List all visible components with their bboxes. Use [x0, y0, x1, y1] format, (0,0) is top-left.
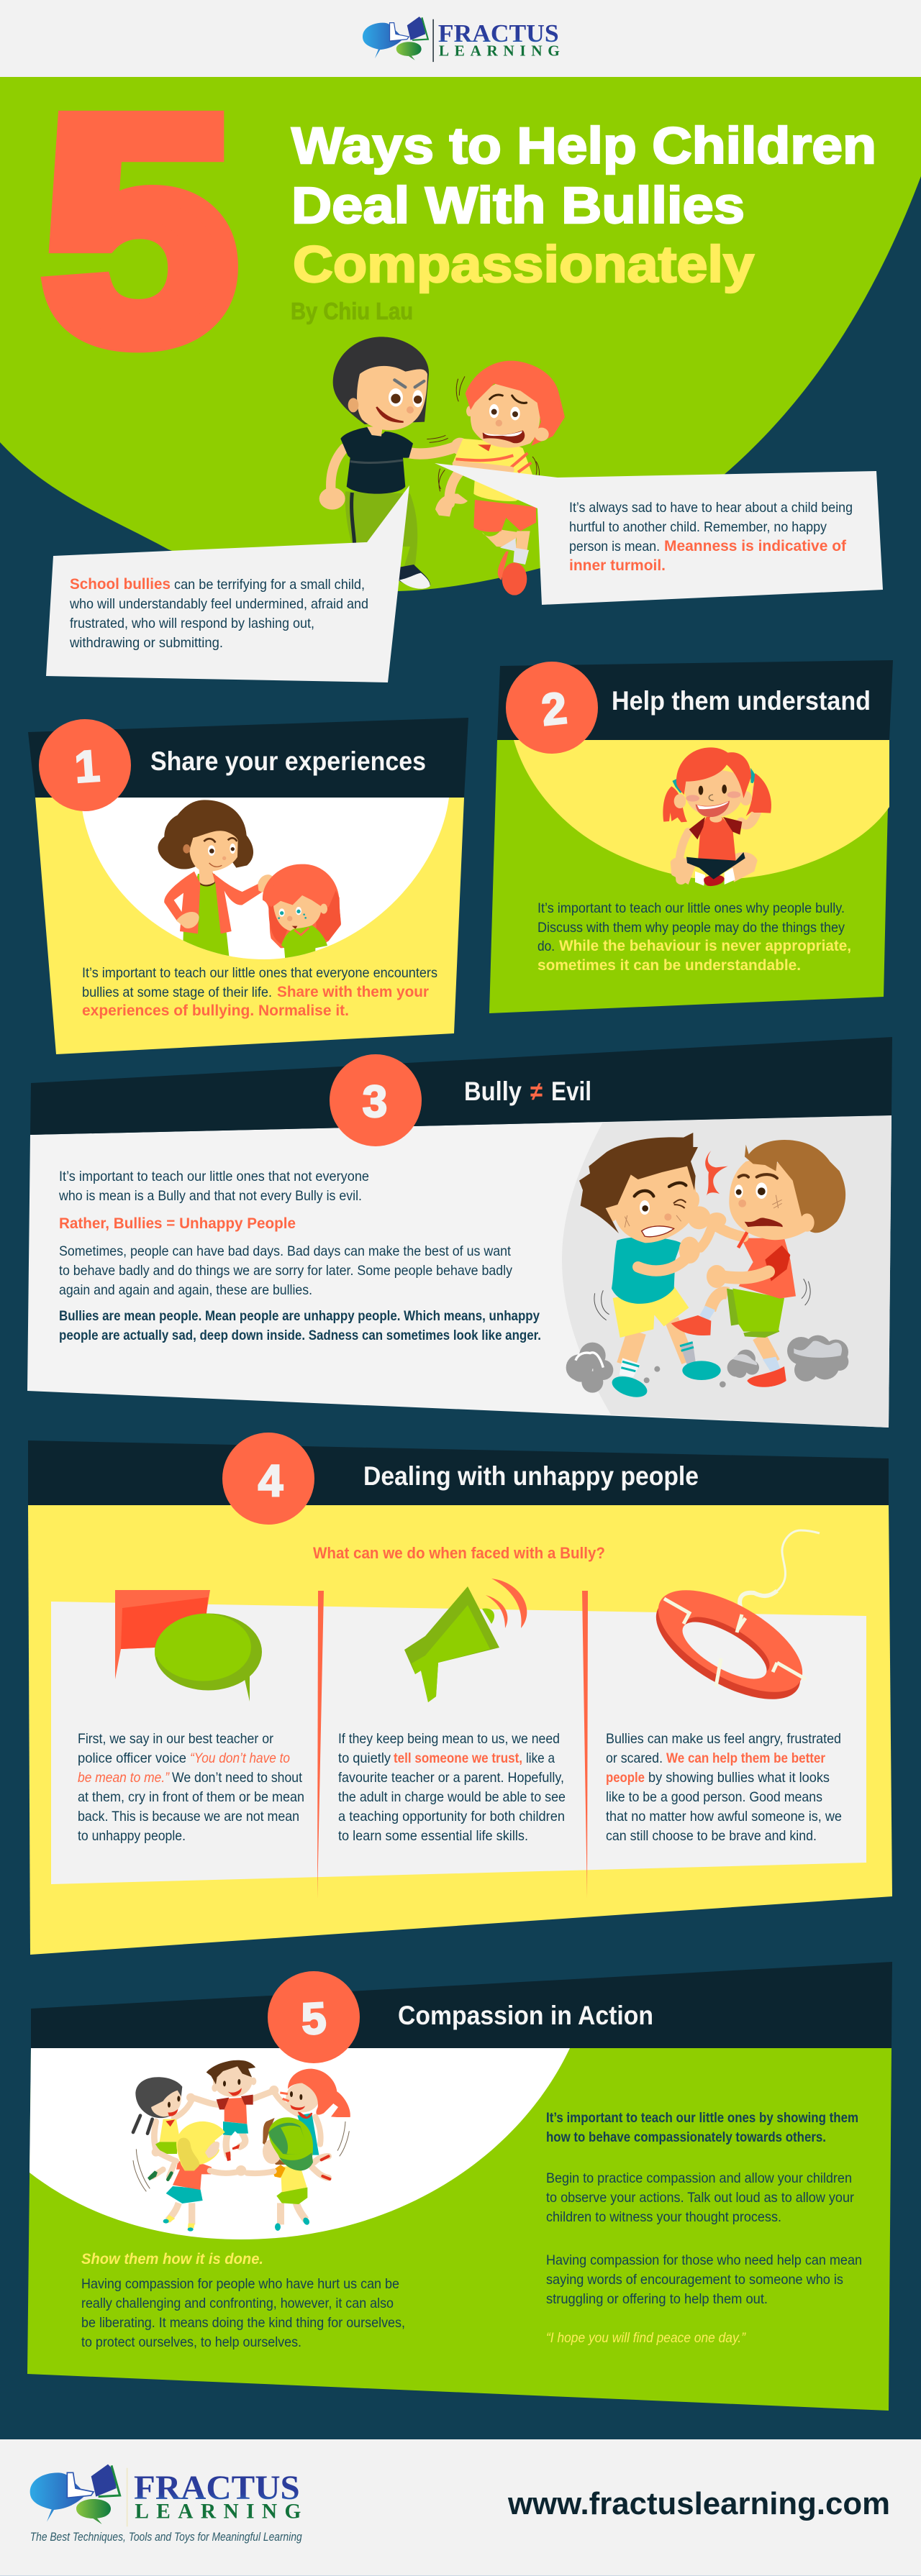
- logo: Fractus Learning top: LEARNING: [439, 42, 560, 60]
- callout: sad to hear: inner turmoil.: [569, 557, 666, 574]
- number badge 4: [222, 1433, 314, 1525]
- dividers: [317, 1591, 588, 1899]
- column 3 text: like to be a good person. Good means: [606, 1789, 822, 1805]
- logo: Fractus Learning top: FRACTUS: [438, 19, 559, 47]
- text: panel 3: who is mean is a Bully and that not every Bully is evil.: [58, 1188, 362, 1204]
- callout: school bullies: withdrawing or submitting.: [69, 635, 223, 651]
- heading 4: Dealing with unhappy people: [363, 1461, 699, 1491]
- left paragraph: really challenging and confronting, however, it can also: [81, 2296, 394, 2311]
- number badge 2: [506, 662, 598, 754]
- panel 5: compassion in action: [27, 1962, 892, 2411]
- icon: life ring: [640, 1530, 820, 1719]
- right paragraphs: Having compassion for those who need help can mean: [546, 2252, 862, 2268]
- callout: school bullies: who will understandably feel undermined, afraid and: [69, 596, 368, 612]
- number badge 3: 3: [363, 1077, 387, 1127]
- left boy: [579, 1133, 721, 1401]
- logo: Fractus Learning footer: LEARNING: [135, 2500, 301, 2524]
- text: panel 1: Share with them your: [277, 983, 430, 1000]
- callout: sad to hear: [435, 463, 883, 605]
- callout: school bullies: frustrated, who will respond by lashing out,: [70, 616, 314, 631]
- text: panel 3: Bullies are mean people. Mean people are unhappy people. Which means, unhappy: [59, 1308, 540, 1324]
- callout: school bullies: can be terrifying for a small child,: [174, 577, 365, 593]
- text: panel 2: [537, 900, 851, 974]
- panel 1: share your experiences: [28, 718, 468, 1054]
- hero green shape: [0, 77, 921, 591]
- right paragraphs: to observe your actions. Talk out loud as to allow your: [546, 2190, 854, 2206]
- panel 4: dealing with unhappy people: [28, 1433, 892, 1955]
- heading 3: Evil: [551, 1077, 591, 1106]
- column 3 text: Bullies can make us feel angry, frustrated: [606, 1731, 841, 1747]
- column 1 text: be mean to me.”: [78, 1770, 170, 1786]
- website address: www.fractuslearning.com: [507, 2486, 890, 2521]
- footer: [0, 2439, 921, 2576]
- column 1 text: back. This is because we are not mean: [78, 1809, 299, 1824]
- boy with cap: [236, 2117, 313, 2231]
- callout: school bullies: School bullies: [70, 575, 171, 593]
- dust clouds: [566, 1335, 848, 1393]
- heading 3: [464, 1077, 591, 1106]
- column 3 text: We can help them be better: [666, 1750, 825, 1766]
- left paragraph: to protect ourselves, to help ourselves.: [81, 2334, 301, 2350]
- column 1 text: [78, 1731, 304, 1844]
- column 1 text: police officer voice: [78, 1750, 186, 1766]
- column 3 text: can still choose to be brave and kind.: [606, 1828, 817, 1844]
- text: panel 1: It’s important to teach our little ones that everyone encounters: [82, 965, 437, 981]
- bully figure: [319, 337, 469, 589]
- logo: Fractus Learning top: [363, 17, 560, 62]
- text: panel 3: to behave badly and do things we are sorry for later. Some people behave badly: [59, 1263, 512, 1279]
- number badge 5: 5: [300, 1993, 327, 2045]
- number badge 5: [268, 1971, 360, 2063]
- column 1 text: “You don’t have to: [190, 1750, 290, 1766]
- text: panel 1: [82, 965, 437, 1019]
- number badge 1: [39, 719, 131, 811]
- right paragraphs: how to behave compassionately towards others.: [546, 2129, 826, 2145]
- column 3 text: that no matter how awful someone is, we: [606, 1809, 842, 1824]
- girl dark hair: [133, 2077, 192, 2180]
- left paragraph: Having compassion for people who have hurt us can be: [81, 2276, 399, 2292]
- heading 3: Bully: [464, 1077, 522, 1106]
- right paragraphs: saying words of encouragement to someone who is: [546, 2272, 843, 2288]
- left subheading: Show them how it is done.: [81, 2250, 263, 2267]
- anger mark: [705, 1151, 728, 1196]
- column 3 text: people: [606, 1770, 645, 1786]
- text: panel 2: sometimes it can be understandable.: [537, 956, 801, 974]
- column 2 text: to quietly: [338, 1750, 391, 1766]
- illustration: smiling girl: [663, 747, 771, 886]
- main title: Compassionately: [293, 237, 755, 293]
- text: panel 3: people are actually sad, deep down inside. Sadness can sometimes look like anger.: [59, 1328, 541, 1343]
- column 2 text: favourite teacher or a parent. Hopefully,: [338, 1770, 564, 1786]
- subheading: What can we do when faced with a Bully?: [313, 1544, 605, 1562]
- illustration: children holding hands: [133, 2060, 350, 2232]
- blonde girl: [152, 2121, 240, 2232]
- text: panel 3: It’s important to teach our little ones that not everyone: [59, 1169, 369, 1184]
- heading 2: Help them understand: [612, 686, 871, 716]
- logo: Fractus Learning footer: [30, 2465, 301, 2526]
- column 1 text: We don’t need to shout: [172, 1770, 303, 1786]
- text: panel 2: While the behaviour is never appropriate,: [559, 937, 851, 954]
- callout: sad to hear: It’s always sad to have to hear about a child being: [569, 500, 853, 516]
- callout: sad to hear: hurtful to another child. Remember, no happy: [569, 519, 827, 535]
- right paragraphs: children to witness your thought process.: [546, 2209, 781, 2225]
- boy top center: [186, 2060, 278, 2161]
- number badge 4: 4: [258, 1456, 283, 1506]
- main title: Ways to Help Children: [291, 118, 876, 175]
- column 2 text: tell someone we trust,: [394, 1750, 522, 1766]
- column 2 text: a teaching opportunity for both children: [338, 1809, 565, 1824]
- column 3 text: [606, 1731, 842, 1844]
- illustration: bully and victim: [319, 337, 565, 595]
- top header bar with logo: [0, 0, 921, 77]
- main title: Deal With Bullies: [291, 178, 745, 234]
- girl red hair: [275, 2069, 350, 2179]
- content card: [51, 1602, 866, 1884]
- right boy: [671, 1140, 845, 1387]
- text: panel 3: Rather, Bullies = Unhappy People: [59, 1215, 296, 1232]
- right paragraphs: It’s important to teach our little ones by showing them: [546, 2110, 858, 2126]
- victim figure: [427, 361, 565, 595]
- column 2 text: [338, 1731, 566, 1844]
- logo: Fractus Learning footer: FRACTUS: [134, 2469, 300, 2507]
- heading 5: Compassion in Action: [398, 2001, 653, 2030]
- panel 2: help them understand: [489, 660, 893, 1013]
- right paragraphs: Begin to practice compassion and allow your children: [546, 2170, 852, 2186]
- right paragraphs: “I hope you will find peace one day.”: [546, 2330, 746, 2346]
- right paragraphs: struggling or offering to help them out.: [546, 2291, 768, 2307]
- number badge 1: 1: [73, 741, 101, 793]
- big number 5: 5: [42, 52, 237, 408]
- heading 3: ≠: [530, 1077, 543, 1106]
- text: panel 2: It’s important to teach our little ones why people bully.: [537, 900, 845, 916]
- column 1 text: to unhappy people.: [78, 1828, 186, 1844]
- callout: school bullies: [46, 485, 409, 682]
- number badge 2: 2: [540, 683, 569, 736]
- text: panel 1: experiences of bullying. Normalise it.: [82, 1002, 349, 1019]
- column 3 text: or scared.: [606, 1750, 663, 1766]
- text: panel 3: again and again and again, these are bullies.: [59, 1282, 312, 1298]
- text: panel 3: [58, 1169, 541, 1343]
- text: panel 3: Sometimes, people can have bad days. Bad days can make the best of us want: [59, 1243, 512, 1259]
- column 2 text: the adult in charge would be able to see: [338, 1789, 566, 1805]
- text: panel 1: bullies at some stage of their life.: [82, 985, 272, 1000]
- right paragraphs: [546, 2110, 862, 2346]
- text: panel 2: do.: [537, 938, 555, 954]
- number badge 3: [330, 1054, 422, 1146]
- text: panel 2: Discuss with them why people may do the things they: [537, 920, 845, 936]
- panel 3: bully is not evil: [27, 1037, 892, 1428]
- illustration: two boys fighting: [566, 1133, 848, 1401]
- tagline: The Best Techniques, Tools and Toys for Meaningful Learning: [30, 2530, 302, 2544]
- column 1 text: First, we say in our best teacher or: [78, 1731, 273, 1747]
- main title: [291, 118, 876, 293]
- icon: megaphone: [404, 1579, 527, 1702]
- callout: sad to hear: Meanness is indicative of: [664, 537, 847, 554]
- column 2 text: If they keep being mean to us, we need: [338, 1731, 560, 1747]
- column 2 text: like a: [526, 1750, 555, 1766]
- icon: speech bubbles: [115, 1590, 262, 1702]
- left paragraph: be liberating. It means doing the kind thing for ourselves,: [81, 2315, 405, 2331]
- illustration: mother comforting child: [158, 800, 341, 967]
- heading 1: Share your experiences: [150, 746, 426, 776]
- callout: sad to hear: person is mean.: [569, 539, 660, 554]
- column 1 text: at them, cry in front of them or be mean: [78, 1789, 304, 1805]
- column 2 text: to learn some essential life skills.: [338, 1828, 528, 1844]
- left paragraph: [81, 2276, 405, 2350]
- byline: By Chiu Lau: [291, 298, 413, 324]
- column 3 text: by showing bullies what it looks: [648, 1770, 830, 1786]
